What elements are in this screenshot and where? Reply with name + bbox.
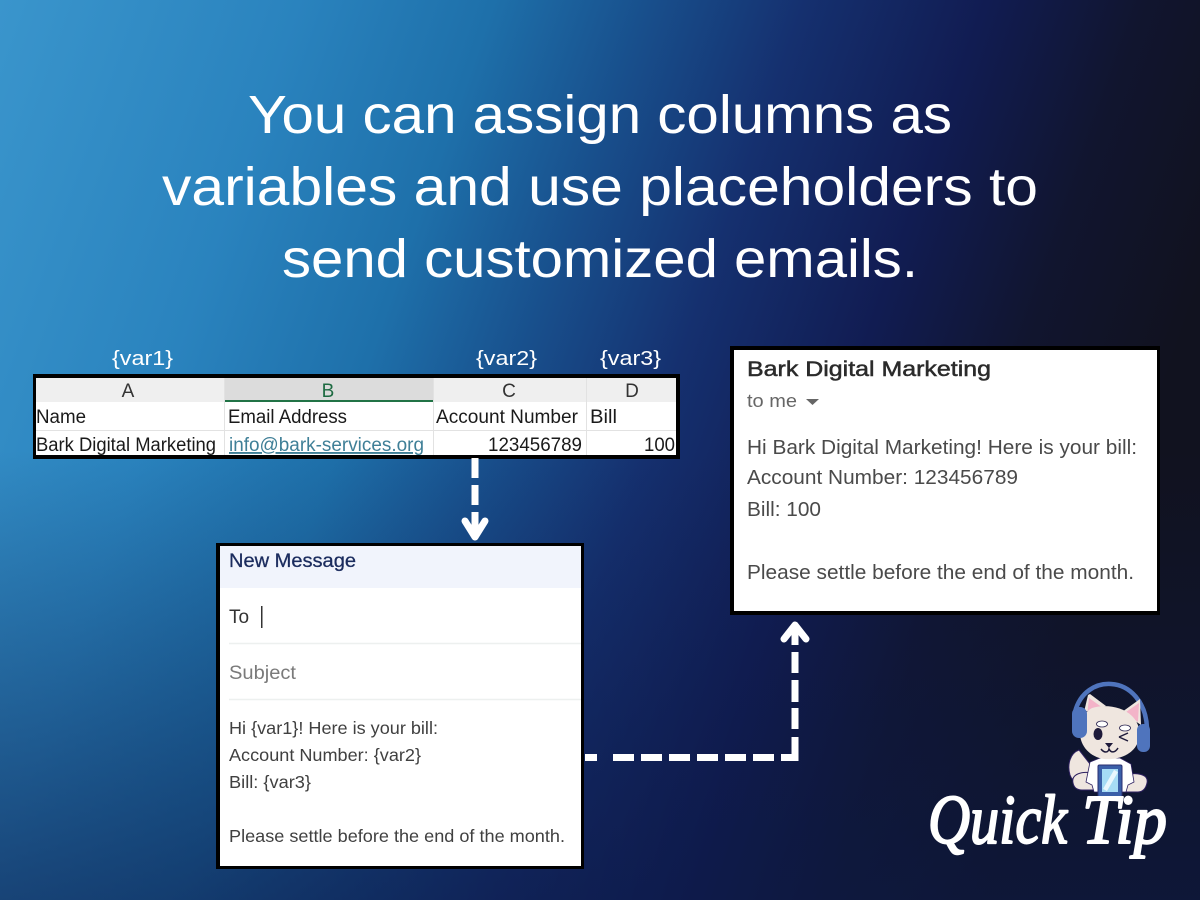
subject field: Subject bbox=[229, 663, 297, 684]
to field: To bbox=[229, 607, 249, 628]
recipient line bbox=[747, 391, 819, 411]
personalized message body bbox=[747, 437, 1137, 584]
logo text: Quick Tip bbox=[928, 782, 1167, 859]
ears bbox=[1084, 694, 1106, 712]
arrow: new message to received email bbox=[585, 625, 806, 758]
field dividers bbox=[229, 644, 581, 700]
shirt bbox=[1086, 758, 1134, 792]
column headers bbox=[122, 381, 639, 402]
column headers: A bbox=[122, 381, 135, 402]
template message body: Account Number: {var2} bbox=[229, 745, 421, 765]
tablet bbox=[1098, 765, 1122, 797]
legs bbox=[1073, 772, 1098, 790]
arrow: spreadsheet to new message bbox=[465, 458, 485, 538]
title bbox=[162, 85, 1038, 289]
tail bbox=[1069, 750, 1090, 782]
face bbox=[1094, 728, 1102, 740]
data row bbox=[36, 435, 675, 456]
template message body: Please settle before the end of the month. bbox=[229, 826, 565, 846]
title: variables and use placeholders to bbox=[162, 157, 1038, 217]
header row bbox=[36, 407, 617, 428]
panel: spreadsheet bbox=[33, 374, 680, 459]
variable labels above the spreadsheet: {var3} bbox=[600, 348, 661, 370]
panel: received email bbox=[730, 346, 1160, 615]
variable labels above the spreadsheet bbox=[112, 348, 661, 370]
title: You can assign columns as bbox=[248, 85, 952, 145]
compose heading: New Message bbox=[229, 550, 356, 572]
data row: Bark Digital Marketing bbox=[36, 435, 216, 456]
data row: 123456789 bbox=[488, 435, 582, 456]
sender name: Bark Digital Marketing bbox=[747, 357, 991, 381]
headband bbox=[1075, 684, 1147, 728]
column headers: B bbox=[322, 381, 334, 402]
headphone cups bbox=[1072, 707, 1087, 738]
header row: Email Address bbox=[228, 407, 347, 428]
head bbox=[1080, 706, 1139, 759]
template message body: Hi {var1}! Here is your bill: bbox=[229, 718, 438, 738]
logo text: Quick Tip: Quick bbox=[928, 782, 1069, 859]
personalized message body: Account Number: 123456789 bbox=[747, 467, 1018, 489]
variable labels above the spreadsheet: {var1} bbox=[112, 348, 173, 370]
personalized message body: Hi Bark Digital Marketing! Here is your bill: bbox=[747, 437, 1137, 459]
header row: Name bbox=[36, 407, 86, 428]
header row: Bill bbox=[590, 407, 617, 428]
template message body: Bill: {var3} bbox=[229, 772, 311, 792]
personalized message body: Bill: 100 bbox=[747, 499, 821, 521]
data row: 100 bbox=[644, 435, 675, 456]
data row: info@bark-services.org bbox=[229, 435, 424, 456]
title: send customized emails. bbox=[282, 229, 918, 289]
template message body bbox=[229, 718, 565, 846]
logo text: Quick Tip: Tip bbox=[1082, 782, 1167, 859]
header row: Account Number bbox=[436, 407, 579, 428]
icon: mascot fox with headphones and tablet bbox=[1069, 684, 1150, 797]
to field bbox=[229, 606, 262, 628]
column headers: D bbox=[625, 381, 639, 402]
recipient line: to me bbox=[747, 391, 797, 411]
variable labels above the spreadsheet: {var2} bbox=[476, 348, 537, 370]
column headers: C bbox=[502, 381, 516, 402]
panel: new message compose window bbox=[216, 543, 584, 869]
personalized message body: Please settle before the end of the month. bbox=[747, 562, 1134, 584]
